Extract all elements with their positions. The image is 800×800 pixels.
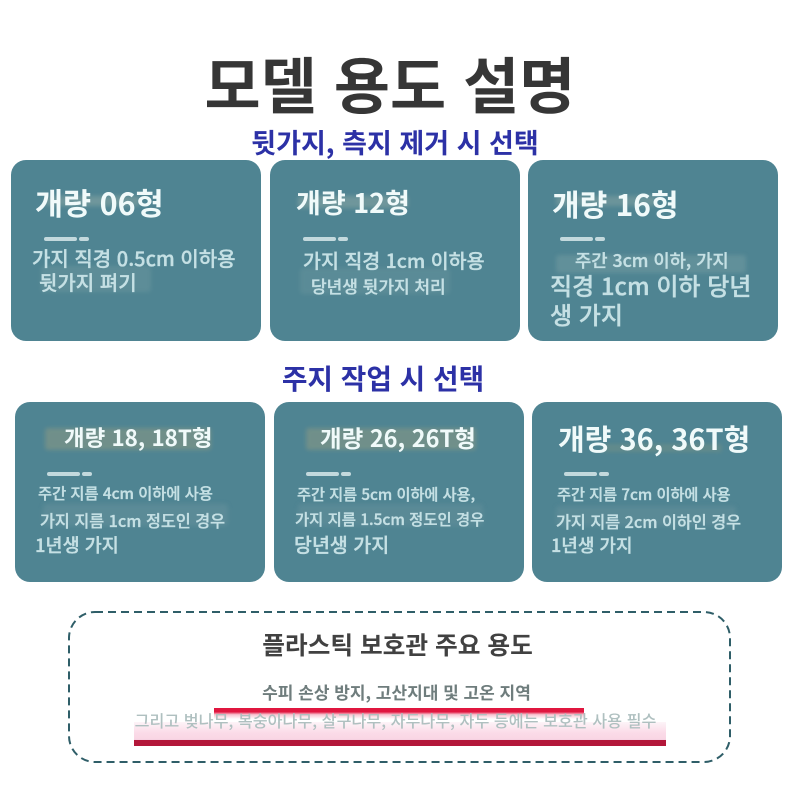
text: model 16 description line 3: 생 가지 [550, 296, 623, 331]
text: model 26 description line 3: 당년생 가지 [294, 529, 389, 558]
heading: plastic protector: 플라스틱 보호관 주요 용도 [262, 626, 533, 662]
heading: model 26: 개량 26, 26T형 [320, 420, 476, 454]
text: model 12 description line 2: 당년생 뒷가지 처리 [311, 273, 446, 298]
heading: model 12: 개량 12형 [296, 182, 410, 221]
text: model 12 description line 1: 가지 직경 1cm 이하용 [303, 245, 485, 274]
text: model 18 description line 2: 가지 지름 1cm 정도인 경우 [40, 508, 225, 532]
text: model 16 description line 1: 주간 3cm 이하, 가지 [575, 247, 729, 273]
divider bar [303, 237, 348, 241]
panel: model 36 [532, 402, 782, 582]
heading: model 16: 개량 16형 [552, 181, 679, 225]
text: model 26 description line 1: 주간 지름 5cm 이하에 사용, [297, 483, 475, 505]
panel: model 18 [15, 402, 265, 582]
text: model 36 description line 1: 주간 지름 7cm 이하에 사용 [557, 483, 731, 505]
panel: model 26 [274, 402, 524, 582]
heading: model 18: 개량 18, 18T형 [64, 421, 212, 453]
divider bar [560, 237, 605, 241]
title: 모델 용도 설명 [205, 37, 575, 126]
text: model 26 description line 2: 가지 지름 1.5cm 정도인 경우 [295, 508, 484, 530]
highlight band: second line [134, 722, 666, 746]
heading: model 06: 개량 06형 [35, 180, 164, 224]
divider bar [44, 237, 89, 241]
text: model 16 description line 2: 직경 1cm 이하 당년 [550, 267, 751, 302]
divider bar [306, 472, 351, 476]
panel: model 16 [528, 160, 778, 341]
text: usage line 1: 수피 손상 방지, 고산지대 및 고온 지역 [262, 679, 531, 704]
text: model 06 description line 1: 가지 직경 0.5cm 이하용 [32, 243, 236, 272]
text: model 18 description line 1: 주간 지름 4cm 이하에 사용 [38, 482, 213, 504]
divider bar [564, 472, 609, 476]
text: model 06 description line 2: 뒷가지 펴기 [39, 267, 137, 296]
heading: model 36: 개량 36, 36T형 [558, 417, 750, 459]
panel: plastic protector dashed box [68, 611, 731, 763]
highlight band: first line [214, 708, 584, 719]
panel: model 06 [11, 160, 261, 341]
divider bar [47, 472, 92, 476]
text: model 18 description line 3: 1년생 가지 [35, 532, 119, 558]
text: model 36 description line 3: 1년생 가지 [551, 532, 633, 558]
text: model 36 description line 2: 가지 지름 2cm 이하인 경우 [556, 509, 741, 533]
panel: model 12 [270, 160, 520, 341]
heading: side branch section: 뒷가지, 측지 제거 시 선택 [251, 122, 539, 161]
heading: main trunk section: 주지 작업 시 선택 [282, 358, 484, 398]
text: usage line 2: 그리고 벚나무, 복숭아나무, 살구나무, 자두나무, 자두 등에는 보호관 사용 필수 [135, 708, 656, 732]
